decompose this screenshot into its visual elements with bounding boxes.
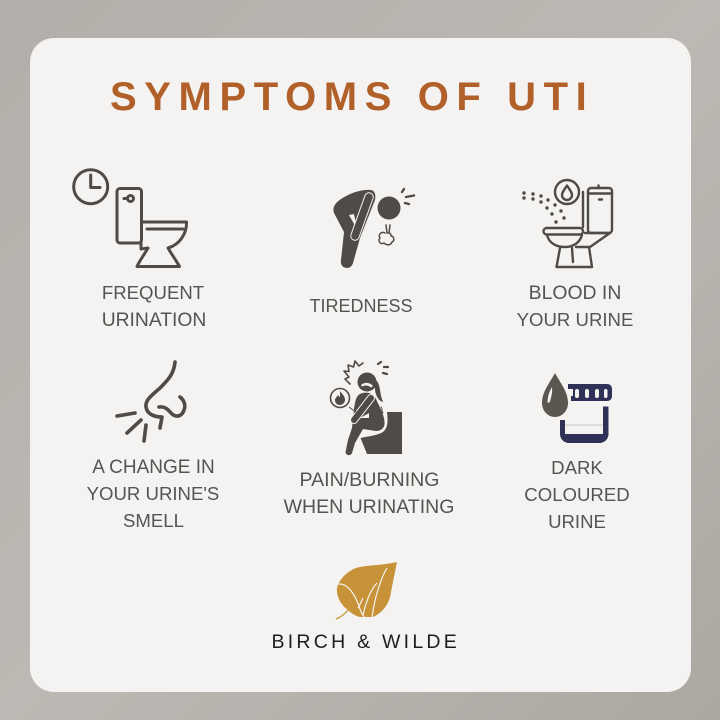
label: BLOOD IN — [529, 282, 621, 304]
symptom: pain or burning — [284, 361, 454, 518]
label: YOUR URINE — [517, 309, 633, 330]
logo: Birch and Wilde — [272, 562, 460, 653]
label: WHEN URINATING — [284, 496, 454, 518]
label: TIREDNESS — [309, 296, 413, 316]
icon: urine cup and drop — [542, 373, 612, 443]
symptom: tiredness — [309, 189, 414, 316]
symptom: frequent urination — [74, 170, 206, 331]
label: URINATION — [102, 310, 206, 331]
label: COLOURED — [524, 484, 630, 505]
title: SYMPTOMS OF UTI — [110, 75, 594, 119]
label: A CHANGE IN — [92, 457, 215, 478]
icon: toilet with blood drop — [544, 180, 612, 267]
symptom: change in urine smell — [87, 362, 219, 531]
label: SMELL — [123, 510, 184, 531]
label: YOUR URINE'S — [87, 483, 219, 504]
icon: nose with scent lines — [117, 362, 185, 441]
icon: clock and toilet — [74, 170, 187, 266]
label: DARK — [551, 457, 603, 478]
symptom: dark coloured urine — [524, 373, 630, 532]
label: PAIN/BURNING — [299, 469, 440, 491]
icon: birch leaf — [336, 562, 397, 619]
wordmark: BIRCH & WILDE — [272, 631, 460, 653]
icon: person on toilet with flame — [330, 361, 402, 455]
label: FREQUENT — [102, 282, 204, 303]
dots: spray — [522, 191, 566, 224]
label: URINE — [548, 511, 606, 532]
symptom: blood in your urine — [517, 180, 633, 330]
icon: bent over figure — [333, 189, 414, 268]
